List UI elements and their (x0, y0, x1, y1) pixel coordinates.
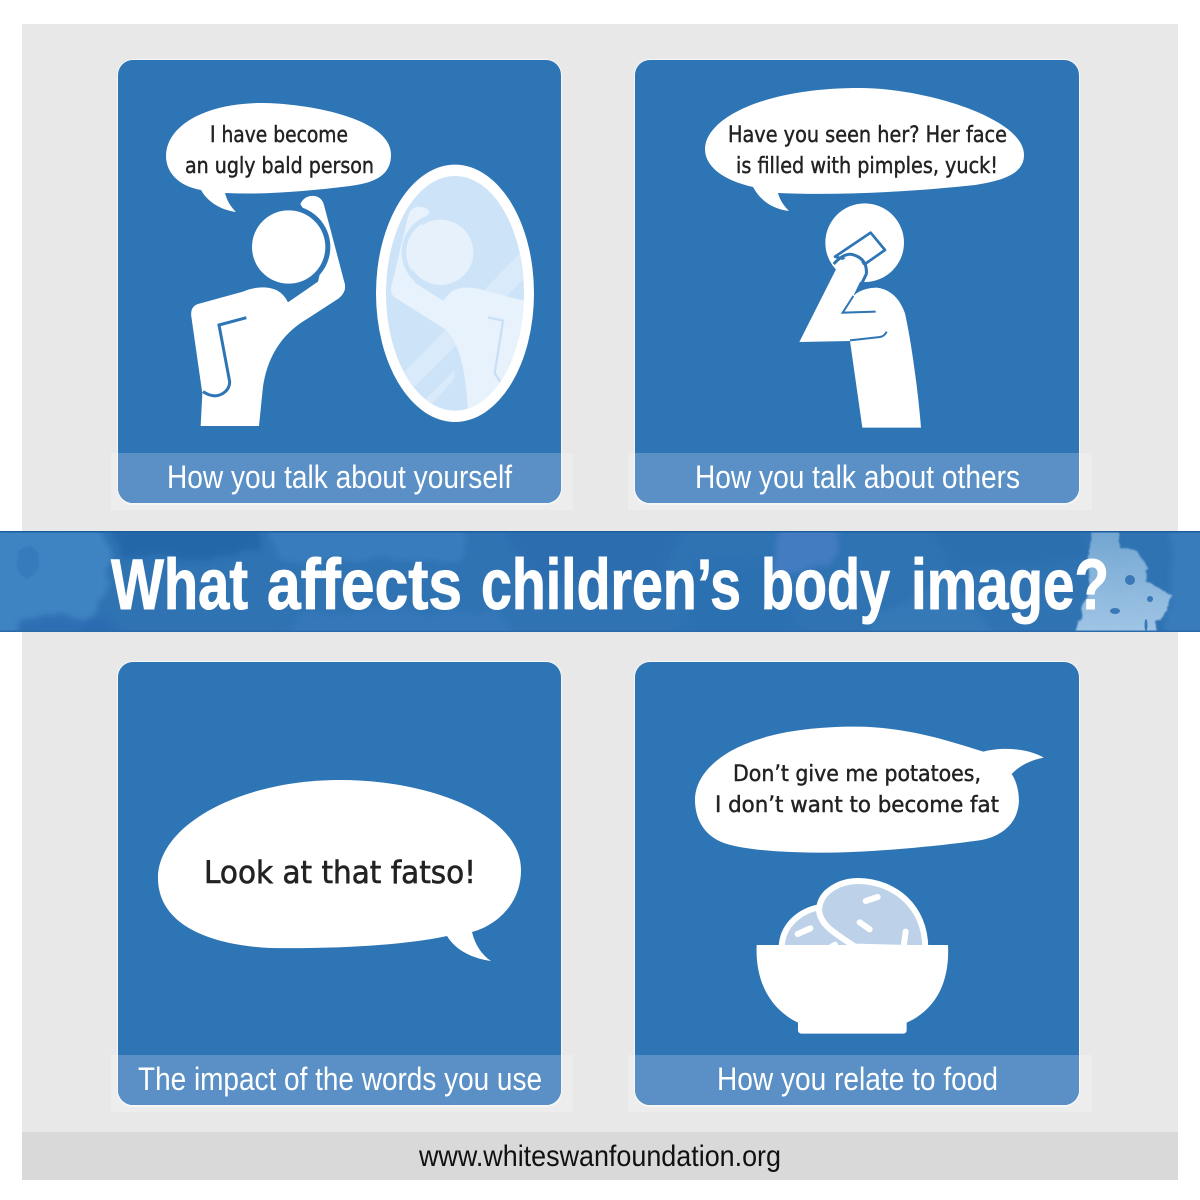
caption strip: others (635, 453, 1079, 503)
caption: words: The impact of the words you use (138, 1061, 542, 1097)
speech bubble: yourself: an ugly bald person (185, 154, 374, 179)
title: body (761, 546, 890, 625)
caption strip: yourself (118, 453, 561, 503)
mirror (376, 165, 534, 422)
speech bubble: others: Have you seen her? Her face (728, 123, 1007, 148)
title: affects (267, 546, 462, 625)
speech bubble: yourself: I have become (210, 123, 348, 148)
speech bubble: yourself (166, 103, 391, 212)
panel: the impact of the words you use (111, 661, 573, 1112)
speech bubble: others (705, 88, 1024, 211)
person body (191, 196, 345, 426)
panel: how you talk about others (628, 59, 1092, 510)
speech bubble: food (695, 727, 1044, 853)
panel: how you relate to food (628, 661, 1092, 1112)
caption strip: words (118, 1055, 561, 1105)
title: image? (911, 546, 1109, 625)
illustration: person on phone (799, 203, 921, 428)
title: What (111, 546, 248, 625)
title: children’s (481, 546, 741, 625)
illustration: person at mirror (191, 165, 534, 426)
caption: food: How you relate to food (717, 1061, 998, 1097)
speech bubble: others: is filled with pimples, yuck! (736, 154, 998, 179)
website url: www.whiteswanfoundation.org (418, 1140, 781, 1173)
illustration: bowl of potatoes (757, 881, 948, 1034)
caption strip: food (635, 1055, 1079, 1105)
caption: others: How you talk about others (695, 459, 1020, 495)
speech bubble: food: I don’t want to become fat (715, 793, 999, 818)
speech bubble: words: Look at that fatso! (204, 855, 476, 891)
caption: yourself: How you talk about yourself (167, 459, 512, 495)
speech bubble: food: Don’t give me potatoes, (733, 762, 981, 787)
speech bubble: words (158, 780, 521, 961)
panel: how you talk about yourself (111, 59, 573, 510)
title banner (0, 531, 1200, 632)
footer (22, 1132, 1178, 1180)
